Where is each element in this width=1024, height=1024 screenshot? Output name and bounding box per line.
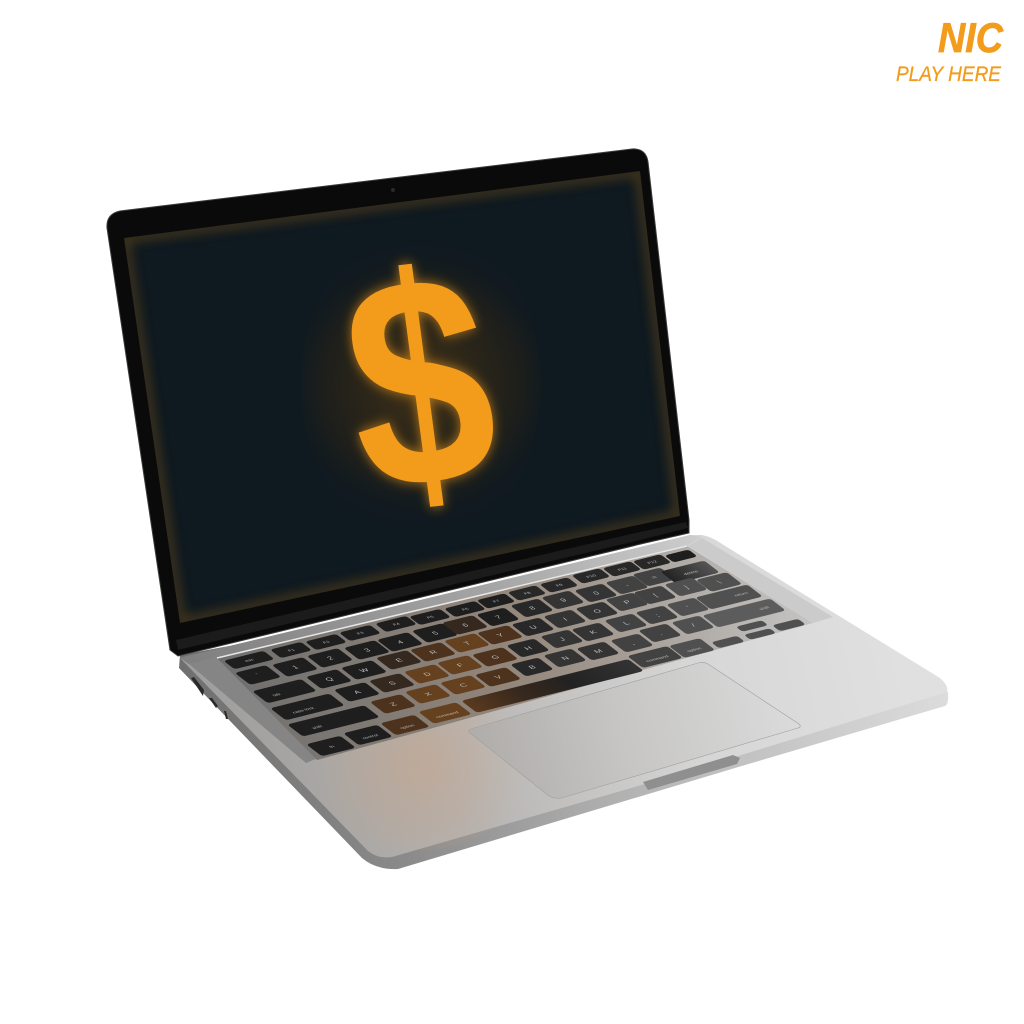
number key row: 9 (558, 597, 569, 603)
ZXCV key row: M (592, 648, 605, 654)
ASDF key row: H (522, 645, 534, 651)
ASDF key row: S (386, 680, 398, 686)
ZXCV key row: C (457, 682, 470, 688)
warm reflection on palm rest (310, 680, 530, 850)
ASDF key row: G (489, 654, 502, 660)
number key row: 7 (493, 614, 504, 620)
ASDF key row: K (587, 629, 599, 635)
screen (124, 171, 680, 623)
number key row: 0 (591, 590, 602, 596)
ASDF key row: ; (653, 612, 661, 618)
ZXCV key row: / (689, 622, 698, 628)
function key row: F5 (426, 615, 435, 619)
screen edge glow (124, 171, 680, 623)
dollar sign glow: $ (328, 209, 512, 555)
ASDF key row: return (733, 591, 750, 597)
QWERTY key row: E (393, 657, 405, 663)
laptop (107, 149, 948, 869)
function key row: F9 (555, 583, 564, 587)
laptop deck top surface (180, 535, 947, 857)
number key row: 8 (527, 605, 538, 611)
number key row: 5 (430, 630, 441, 636)
number key row: 4 (395, 639, 406, 645)
function key row: F3 (356, 631, 365, 635)
bottom key row: command (435, 711, 460, 719)
number key row: 2 (325, 655, 336, 661)
ZXCV key row: Z (388, 701, 399, 707)
function key row: F10 (585, 574, 598, 579)
ASDF key row (270, 584, 763, 720)
ZXCV key row: . (656, 630, 664, 636)
ZXCV key row: shift (758, 606, 771, 611)
QWERTY key row: [ (651, 592, 660, 598)
ASDF key row: L (621, 620, 632, 626)
QWERTY key row: Y (494, 632, 506, 638)
ZXCV key row: shift (311, 725, 324, 730)
bottom key row: command (645, 655, 670, 663)
ZXCV key row: N (559, 655, 571, 661)
band behind keyboard (180, 535, 702, 664)
function key row: F4 (392, 622, 401, 626)
QWERTY key row: tab (271, 692, 282, 697)
number key row: = (649, 574, 660, 580)
QWERTY key row: T (462, 640, 473, 646)
function key row: F2 (322, 640, 331, 644)
function key row: F1 (287, 648, 296, 652)
number key row: 3 (362, 647, 373, 653)
bottom key row: control (361, 733, 379, 740)
ASDF key row: ' (684, 604, 693, 610)
lid opening notch (643, 755, 740, 790)
keyboard well (217, 546, 813, 760)
ASDF key row: caps lock (291, 706, 316, 714)
bottom key row (306, 619, 806, 756)
QWERTY key row: P (621, 599, 633, 605)
number key row: delete (682, 570, 700, 576)
ZXCV key row (287, 598, 786, 736)
ZXCV key row: V (492, 674, 504, 680)
ASDF key row: J (557, 636, 568, 642)
ZXCV key row: , (628, 640, 636, 646)
number key row: ` (254, 672, 263, 678)
left speaker grille (189, 657, 318, 763)
dollar halo (301, 224, 541, 544)
keyboard well highlight (217, 546, 687, 658)
dollar sign: $ (328, 209, 512, 555)
function key row: esc (244, 658, 256, 663)
function key row: F7 (492, 599, 501, 603)
number key row: - (623, 582, 632, 588)
webcam (391, 188, 395, 192)
ASDF key row: A (351, 689, 363, 695)
bottom key row: option (686, 647, 703, 653)
ASDF key row: D (421, 671, 434, 677)
function key row: F6 (461, 607, 470, 611)
QWERTY key row: R (427, 649, 440, 655)
QWERTY key row: O (591, 608, 604, 614)
laptop base side edge (179, 560, 948, 869)
ZXCV key row: B (526, 664, 538, 670)
QWERTY key row: U (527, 624, 539, 630)
bottom key row: fn (328, 745, 336, 749)
keyboard (223, 550, 806, 756)
right speaker grille (688, 538, 833, 623)
number key row: 6 (460, 622, 471, 628)
function key row: F8 (523, 591, 532, 595)
QWERTY key row: I (561, 616, 569, 622)
logo: NIC play here (896, 14, 1004, 86)
side ports (191, 677, 228, 719)
trackpad (469, 662, 800, 798)
ZXCV key row: X (422, 691, 434, 697)
QWERTY key row (252, 572, 742, 703)
number key row: 1 (290, 664, 301, 670)
QWERTY key row: ] (682, 584, 690, 590)
bottom key row: option (399, 724, 416, 730)
number key row (235, 560, 720, 685)
function key row: F12 (646, 560, 659, 565)
function key row: F11 (616, 567, 629, 572)
hinge strip (176, 522, 688, 650)
logo tagline: PLAY HERE (896, 63, 1002, 86)
QWERTY key row: \ (715, 579, 724, 585)
logo name: NIC (938, 14, 1004, 61)
laptop lid (107, 149, 689, 656)
QWERTY key row: W (357, 667, 371, 674)
ASDF key row: F (455, 662, 466, 668)
QWERTY key row: Q (323, 676, 336, 682)
function key row (223, 550, 698, 669)
